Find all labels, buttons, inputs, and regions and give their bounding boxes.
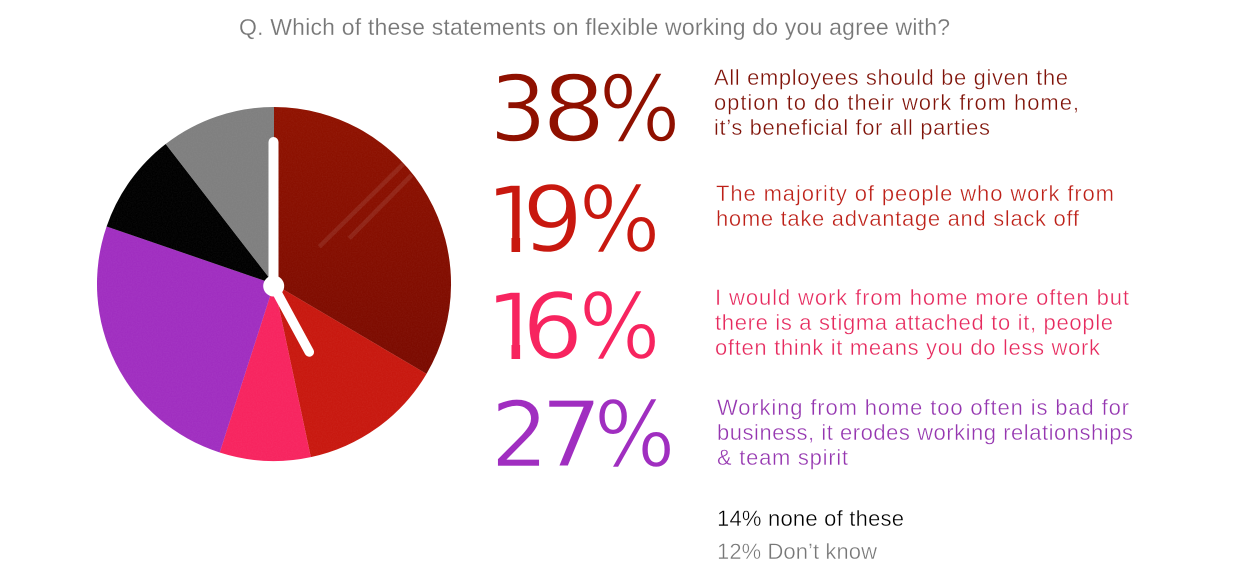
stat: 27%: 2: [490, 382, 549, 488]
stat: 38%: [490, 56, 680, 163]
slice: 14% black: [107, 144, 274, 284]
stat: 16%: %: [579, 274, 660, 380]
statement: 19%: home take advantage and slack off: [716, 206, 1080, 231]
statement: 16%: there is a stigma attached to it, people: [715, 310, 1113, 335]
statement: 27%: [717, 395, 1133, 470]
statement: 16%: often think it means you do less work: [715, 335, 1101, 360]
stat: 19%: 1: [486, 168, 543, 274]
note: don't know: 12% Don’t know: [717, 539, 877, 564]
stat: 27%: %: [594, 382, 675, 488]
statement: 38%: [714, 65, 1079, 140]
stat: 16%: [486, 274, 660, 380]
slice: 16% pink: [220, 284, 311, 461]
slice: 27% purple: [97, 226, 274, 452]
statement: 27%: business, it erodes working relationships: [717, 420, 1133, 445]
slice: 12% grey: [166, 107, 274, 284]
clock hands: [263, 142, 309, 352]
statement: 19%: [716, 181, 1114, 231]
stat: 38%: %: [599, 56, 680, 162]
title: Q. Which of these statements on flexible working do you agree with?: [239, 14, 950, 40]
stat: 38%: 8: [542, 56, 606, 162]
slice: 19% red: [274, 284, 426, 457]
slice: 38% dark red: [274, 107, 451, 374]
statement: 38%: it’s beneficial for all parties: [714, 115, 990, 140]
glass highlight streaks: [319, 164, 412, 247]
statement: 27%: Working from home too often is bad for: [717, 395, 1129, 420]
stat: 19%: %: [579, 167, 660, 273]
pie chart clock: [97, 107, 451, 461]
statement: 16%: [715, 285, 1129, 360]
statement: 38%: All employees should be given the: [714, 65, 1068, 90]
stat: 38%: 3: [490, 57, 547, 163]
stat: 27%: [490, 382, 675, 489]
stat: 19%: [486, 167, 660, 274]
stat: 16%: 6: [522, 275, 583, 380]
statement: 38%: option to do their work from home,: [714, 90, 1079, 115]
stat: 16%: 1: [486, 276, 543, 380]
pie texture: [97, 107, 451, 461]
statement: 19%: The majority of people who work from: [716, 181, 1114, 206]
statement: 16%: I would work from home more often but: [715, 285, 1129, 310]
statement: 27%: & team spirit: [717, 445, 848, 470]
stat: 27%: 7: [540, 383, 602, 489]
stat: 19%: 9: [522, 168, 583, 273]
note: none of these: 14% none of these: [717, 506, 904, 531]
